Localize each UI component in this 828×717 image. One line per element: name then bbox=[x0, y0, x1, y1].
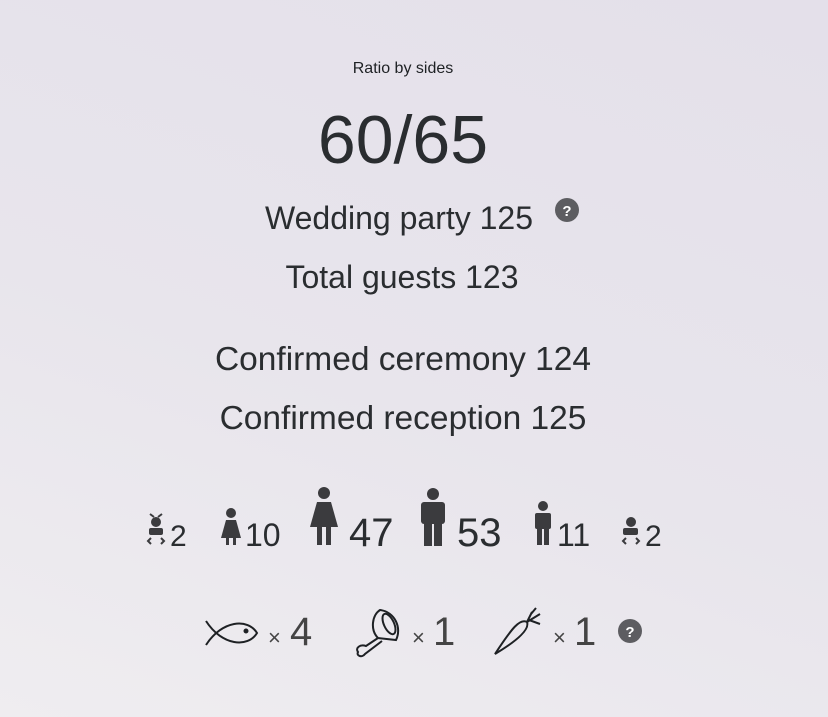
icon: carrot bbox=[495, 608, 540, 654]
count fish: 4 bbox=[290, 610, 312, 654]
icon: fish bbox=[206, 621, 257, 645]
icon: help wedding party: ? bbox=[562, 203, 572, 220]
count fish: × bbox=[268, 625, 281, 650]
meal choices row bbox=[206, 608, 642, 656]
count meat bbox=[412, 610, 455, 654]
count baby boys: 2 bbox=[645, 520, 662, 553]
icon: help wedding party bbox=[555, 198, 579, 222]
heading: ratio by sides: Ratio by sides bbox=[353, 60, 453, 77]
icon: woman bbox=[310, 487, 338, 545]
icon: man bbox=[421, 488, 445, 546]
count vegetarian: × bbox=[553, 625, 566, 650]
icon: meat bbox=[357, 610, 398, 656]
count girls: 10 bbox=[245, 517, 281, 553]
count meat: 1 bbox=[433, 610, 455, 654]
icon: baby boy bbox=[623, 517, 639, 544]
guest breakdown row bbox=[148, 487, 662, 555]
count boys: 11 bbox=[557, 517, 590, 553]
total guests text: Total guests 123 bbox=[285, 259, 519, 295]
count vegetarian bbox=[553, 610, 596, 654]
confirmed ceremony text: Confirmed ceremony 124 bbox=[215, 341, 591, 378]
icon: help meals: ? bbox=[625, 624, 635, 641]
big ratio number: 60/65 bbox=[318, 102, 488, 178]
count women: 47 bbox=[349, 511, 394, 555]
wedding party text: Wedding party 125 bbox=[265, 200, 533, 236]
count meat: × bbox=[412, 625, 425, 650]
icon: help meals bbox=[618, 619, 642, 643]
icon: baby girl bbox=[148, 514, 164, 544]
count vegetarian: 1 bbox=[574, 610, 596, 654]
count baby girls: 2 bbox=[170, 520, 187, 553]
icon: girl bbox=[221, 508, 241, 545]
count fish bbox=[268, 610, 312, 654]
confirmed reception text: Confirmed reception 125 bbox=[220, 400, 586, 437]
icon: boy bbox=[535, 501, 551, 545]
count men: 53 bbox=[457, 511, 502, 555]
